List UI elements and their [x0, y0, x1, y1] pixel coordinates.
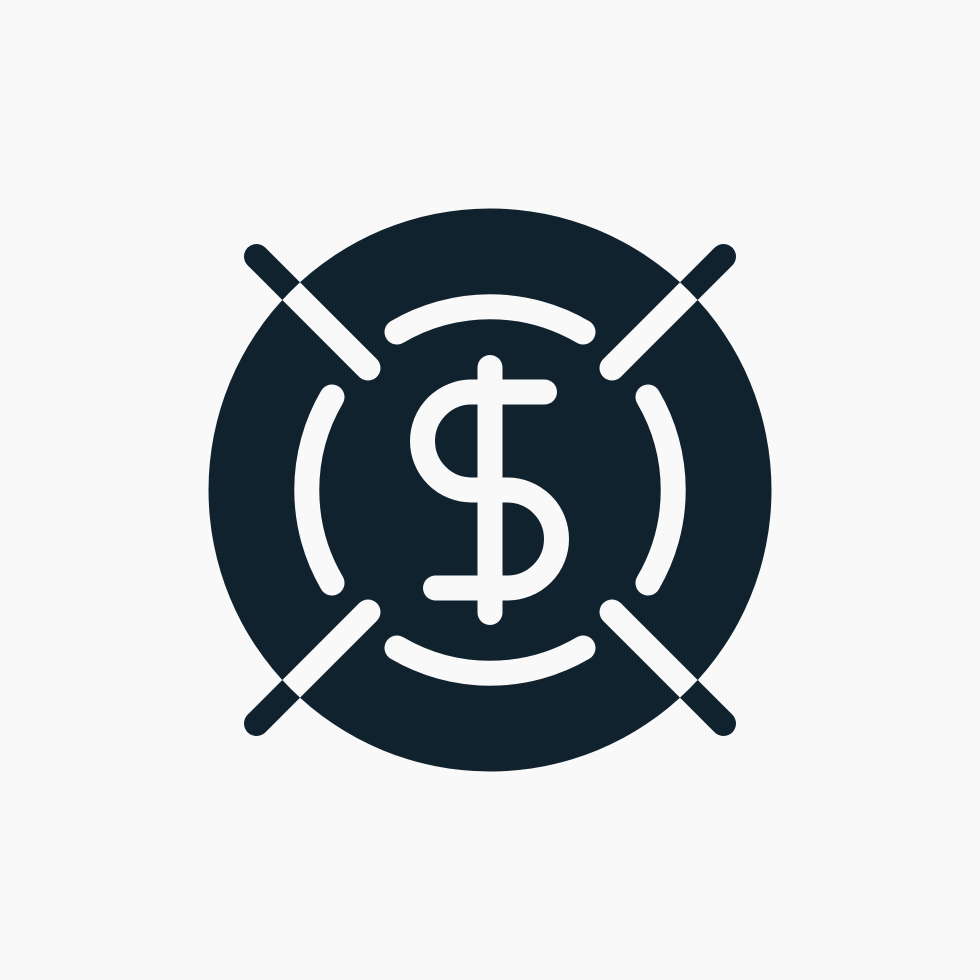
dollar sign: [422, 368, 556, 612]
diagonal crosshair outer segments: [256, 256, 724, 724]
diagonal crosshair inner segments: [282, 282, 698, 698]
ring arcs: [307, 307, 673, 673]
icon: dollar target: [208, 208, 772, 772]
dark circle: [208, 208, 772, 772]
